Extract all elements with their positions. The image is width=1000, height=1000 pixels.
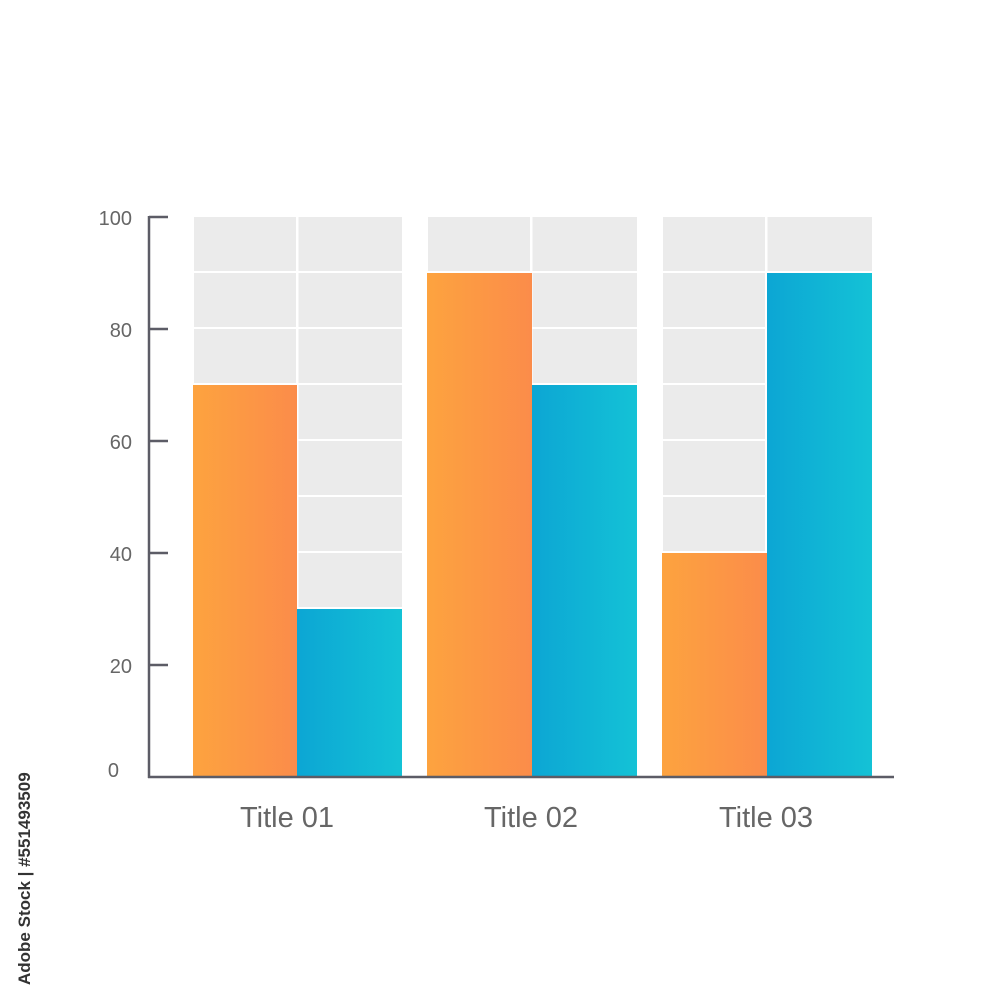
x-axis labels: Title 01 <box>240 802 334 834</box>
y-axis labels: 0 <box>108 760 119 782</box>
watermark id: Adobe Stock | #551493509 <box>15 772 34 985</box>
x-axis labels <box>240 802 813 834</box>
group: Title 02 bars <box>427 273 637 777</box>
y-axis labels: 80 <box>110 320 132 342</box>
group: Title 03 bars <box>662 273 872 777</box>
x-axis labels: Title 02 <box>484 802 578 834</box>
group: Title 01 bars <box>193 385 402 777</box>
y-axis labels: 20 <box>110 656 132 678</box>
y-axis labels: 40 <box>110 544 132 566</box>
y-axis labels: 60 <box>110 432 132 454</box>
axes <box>148 216 894 778</box>
x-axis labels: Title 03 <box>719 802 813 834</box>
gray backgrounds <box>194 217 872 777</box>
y-axis labels <box>99 208 132 782</box>
y-axis labels: 100 <box>99 208 132 230</box>
